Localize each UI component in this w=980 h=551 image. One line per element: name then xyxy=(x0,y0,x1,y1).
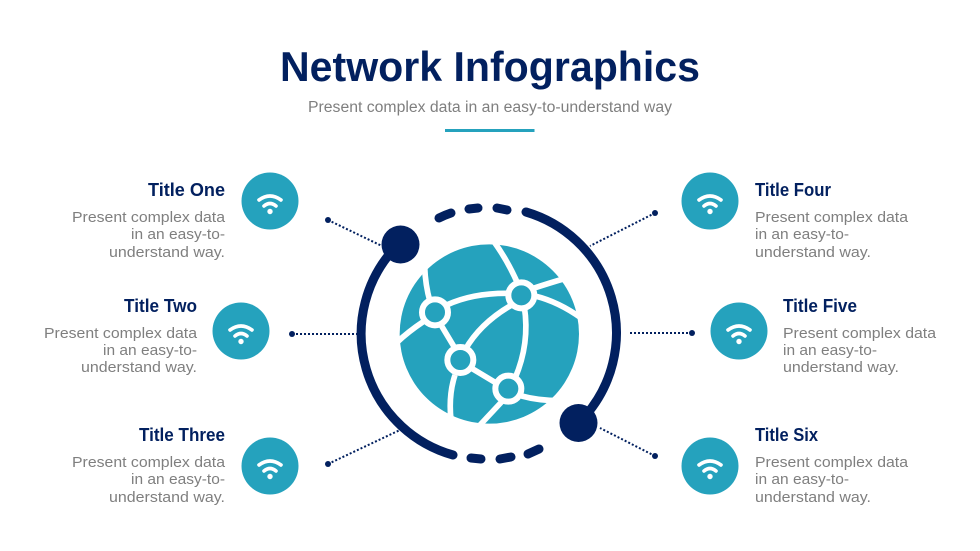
icon: wifi five xyxy=(710,302,768,360)
text block: title six: Title Six xyxy=(755,425,818,445)
connector 4 xyxy=(590,210,658,246)
title underline xyxy=(445,129,534,132)
text block: title four: Title Four xyxy=(755,180,831,200)
orbit node top left xyxy=(382,226,420,264)
central network diagram xyxy=(361,208,616,459)
text block: title six xyxy=(755,425,909,506)
text block: title two: Present complex data xyxy=(44,325,198,342)
icon: wifi three xyxy=(242,438,298,494)
connector 5 xyxy=(628,330,695,336)
text block: title three: in an easy-to- xyxy=(131,471,225,488)
text block: title two xyxy=(44,296,198,376)
text block: title four: in an easy-to- xyxy=(755,226,849,243)
text block: title one: Title One xyxy=(148,180,225,200)
connector 3 xyxy=(325,430,400,467)
text block: title four: Present complex data xyxy=(755,209,909,226)
connector 2 xyxy=(289,331,358,337)
subtitle: Present complex data in an easy-to-understand way xyxy=(308,99,672,116)
globe xyxy=(397,242,582,425)
connector 6 xyxy=(600,428,658,459)
text block: title five: understand way. xyxy=(783,359,899,376)
text block: title six: in an easy-to- xyxy=(755,471,849,488)
text block: title five xyxy=(783,296,937,376)
text block: title two: in an easy-to- xyxy=(103,342,197,359)
text block: title four xyxy=(755,180,909,261)
text block: title one: understand way. xyxy=(109,244,225,261)
icon: wifi two xyxy=(212,302,270,360)
text block: title one: Present complex data xyxy=(72,209,226,226)
text block: title three: understand way. xyxy=(109,489,225,506)
text block: title six: Present complex data xyxy=(755,454,909,471)
orbit ring xyxy=(361,208,616,459)
text block: title one xyxy=(72,180,226,261)
text block: title five: in an easy-to- xyxy=(783,342,877,359)
text block: title five: Present complex data xyxy=(783,325,937,342)
text block: title three xyxy=(72,425,226,506)
orbit node bottom right xyxy=(560,404,598,442)
text block: title five: Title Five xyxy=(783,296,857,316)
text block: title six: understand way. xyxy=(755,489,871,506)
title: Network Infographics xyxy=(280,43,700,90)
icon: wifi four xyxy=(682,172,738,230)
text block: title one: in an easy-to- xyxy=(131,226,225,243)
connector 1 xyxy=(325,217,382,246)
text block: title three: Present complex data xyxy=(72,454,226,471)
icon: wifi one xyxy=(242,172,298,230)
text block: title three: Title Three xyxy=(139,425,225,445)
icon: wifi six xyxy=(682,438,738,494)
text block: title two: Title Two xyxy=(124,296,197,316)
text block: title two: understand way. xyxy=(81,359,197,376)
text block: title four: understand way. xyxy=(755,244,871,261)
